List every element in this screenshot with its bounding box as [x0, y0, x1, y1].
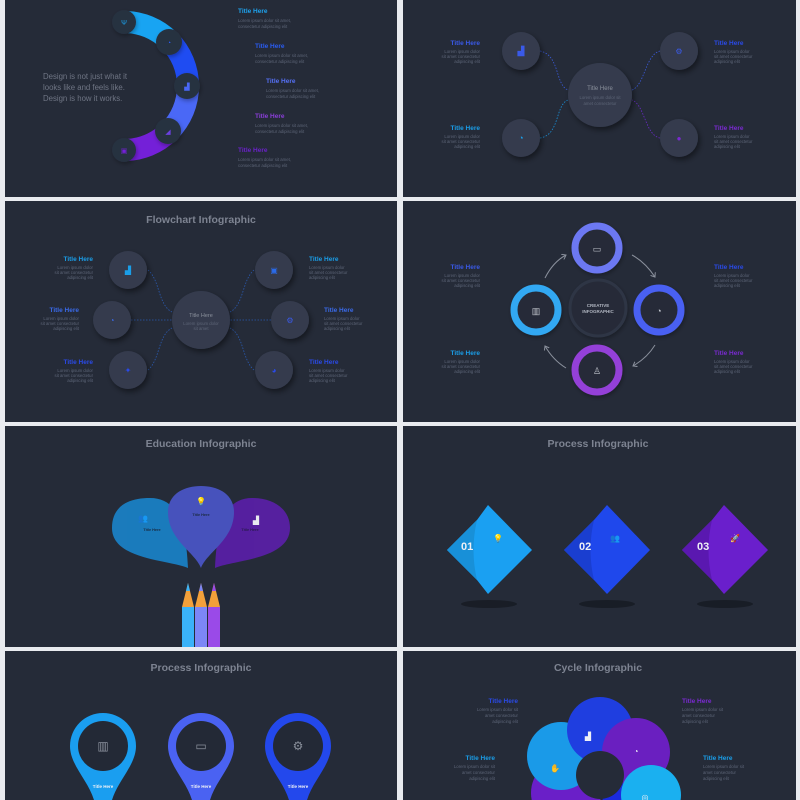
- panel: cycle infographic: adipiscing elit: [469, 776, 496, 781]
- panel: mind map four nodes: ●: [677, 134, 682, 143]
- panel: flowchart infographic: sit amet: [193, 326, 209, 331]
- panel: cycle infographic: adipiscing elit: [703, 776, 730, 781]
- panel: flowchart infographic: ⚙: [286, 316, 294, 325]
- panel: mind map four nodes: adipiscing elit: [454, 59, 481, 64]
- panel: mind map four nodes: sit amet consectetur: [714, 139, 753, 144]
- panel: cycle infographic: Title Here: [682, 698, 712, 705]
- panel: cycle infographic: Title Here: [703, 755, 733, 762]
- panel: mind map four nodes: Lorem ipsum dolor: [444, 134, 481, 139]
- panel: process diamonds: 🚀: [730, 533, 740, 543]
- panel: creative cycle rings: Title Here: [714, 264, 744, 271]
- panel: mind map four nodes: Lorem ipsum dolor: [444, 49, 481, 54]
- panel: creative cycle rings: [403, 201, 796, 422]
- panel: flowchart infographic: adipiscing elit: [67, 275, 94, 280]
- panel: flowchart infographic: ▣: [270, 266, 278, 275]
- panel: mind map four nodes: Title Here: [450, 40, 480, 47]
- petals: [112, 486, 290, 568]
- panel: flowchart infographic: Lorem ipsum dolor: [57, 368, 94, 373]
- panel: flowchart infographic: Title Here: [324, 307, 354, 314]
- panel: mind map four nodes: sit amet consectetur: [442, 54, 481, 59]
- panel: flowchart infographic: adipiscing elit: [309, 378, 336, 383]
- panel: flowchart infographic: Title Here: [309, 256, 339, 263]
- panel: cycle infographic: Cycle Infographic: [554, 662, 642, 674]
- panel: education infographic: 👥: [138, 514, 148, 523]
- panel: flowchart infographic: sit amet consectetur: [55, 270, 94, 275]
- panel: arc infographic: ◔: [167, 40, 171, 47]
- panel: mind map four nodes: [403, 0, 796, 197]
- panel: cycle infographic: ✋: [550, 763, 560, 773]
- panel: process pins: [5, 651, 397, 800]
- quote text: Design is not just what it: [43, 72, 128, 81]
- panel: creative cycle rings: Lorem ipsum dolor: [714, 273, 750, 278]
- panel: process pins: ▥: [97, 739, 109, 753]
- arc titles: Title Here: [266, 78, 296, 85]
- panel: cycle infographic: adipiscing elit: [682, 719, 709, 724]
- arc titles: Lorem ipsum dolor sit amet,: [255, 123, 308, 128]
- panel: flowchart infographic: adipiscing elit: [324, 326, 351, 331]
- panel: creative cycle rings: CREATIVE: [587, 303, 609, 308]
- quote text: looks like and feels like.: [43, 83, 125, 92]
- panel: creative cycle rings: sit amet consectetur: [442, 278, 481, 283]
- panel: arc infographic: ▣: [121, 148, 127, 155]
- panel: process diamonds: 03: [697, 541, 709, 553]
- panel: creative cycle rings: Title Here: [450, 264, 480, 271]
- panel: mind map four nodes: amet consectetur: [584, 101, 617, 106]
- panel: mind map four nodes: Title Here: [450, 125, 480, 132]
- panel: flowchart infographic: adipiscing elit: [67, 378, 94, 383]
- panel: flowchart infographic: Lorem ipsum dolor: [43, 316, 80, 321]
- panel: flowchart infographic: Lorem ipsum dolor: [309, 265, 345, 270]
- panel: cycle infographic: amet consectetur: [485, 713, 519, 718]
- panel: education infographic: [5, 426, 397, 647]
- arc titles: Title Here: [255, 43, 285, 50]
- panel: flowchart infographic: Title Here: [309, 359, 339, 366]
- panel: flowchart infographic: sit amet consectetur: [41, 321, 80, 326]
- arc titles: consectetur adipiscing elit: [255, 129, 305, 134]
- panel: process pins: ▭: [195, 739, 207, 753]
- panel: cycle infographic: Lorem ipsum dolor sit: [454, 764, 496, 769]
- panel: creative cycle rings: Title Here: [714, 350, 744, 357]
- arc segments: [124, 22, 188, 150]
- panel: process diamonds: Process Infographic: [548, 438, 649, 450]
- panel: flowchart infographic: Lorem ipsum dolor: [57, 265, 94, 270]
- arc titles: consectetur adipiscing elit: [255, 59, 305, 64]
- arc node circles: [112, 10, 200, 162]
- panel: mind map four nodes: Title Here: [587, 86, 614, 92]
- panel: creative cycle rings: sit amet consectetur: [714, 364, 753, 369]
- panel: process diamonds: 02: [579, 541, 591, 553]
- panel: flowchart infographic: ▟: [124, 265, 132, 275]
- panel: cycle infographic: Lorem ipsum dolor sit: [477, 707, 519, 712]
- panel: education infographic: Title Here: [241, 528, 259, 532]
- arc titles: Title Here: [238, 147, 268, 154]
- panel: flowchart infographic: Title Here: [63, 359, 93, 366]
- panel: education infographic: Education Infographic: [146, 438, 257, 450]
- panel: education infographic: 💡: [196, 496, 206, 506]
- panel: flowchart infographic: sit amet consectetur: [309, 373, 348, 378]
- panel: mind map four nodes: adipiscing elit: [714, 59, 741, 64]
- panel: cycle infographic: Title Here: [465, 755, 495, 762]
- panel: mind map four nodes: Lorem ipsum dolor: [714, 134, 750, 139]
- panel: creative cycle rings: ▭: [593, 244, 601, 254]
- arc titles: Lorem ipsum dolor sit amet,: [266, 88, 319, 93]
- panel: mind map four nodes: ◔: [518, 133, 524, 143]
- panel: process pins: Title Here: [191, 784, 212, 789]
- arc titles: Lorem ipsum dolor sit amet,: [255, 53, 308, 58]
- panel: process diamonds: 01: [461, 541, 473, 553]
- panel: creative cycle rings: adipiscing elit: [714, 369, 741, 374]
- panel: creative cycle rings: Lorem ipsum dolor: [714, 359, 750, 364]
- panel: process pins: Title Here: [93, 784, 114, 789]
- panel: cycle infographic: Title Here: [488, 698, 518, 705]
- pencils: [182, 583, 220, 647]
- panel: mind map four nodes: adipiscing elit: [714, 144, 741, 149]
- panel: cycle infographic: Lorem ipsum dolor sit: [682, 707, 724, 712]
- panel: education infographic: Title Here: [143, 528, 161, 532]
- panel: education infographic: Title Here: [192, 513, 210, 517]
- panel: mind map four nodes: Lorem ipsum dolor: [714, 49, 750, 54]
- panel: cycle infographic: Lorem ipsum dolor sit: [703, 764, 745, 769]
- arc titles: consectetur adipiscing elit: [238, 24, 288, 29]
- panel: cycle infographic: adipiscing elit: [492, 719, 519, 724]
- panel: mind map four nodes: Title Here: [714, 125, 744, 132]
- panel: mind map four nodes: sit amet consectetur: [714, 54, 753, 59]
- panel: mind map four nodes: Title Here: [714, 40, 744, 47]
- arc titles: consectetur adipiscing elit: [266, 94, 316, 99]
- panel: creative cycle rings: adipiscing elit: [714, 283, 741, 288]
- arc titles: Title Here: [238, 8, 268, 15]
- panel: cycle infographic: amet consectetur: [703, 770, 737, 775]
- panel: process pins: Process Infographic: [151, 662, 252, 674]
- panel: cycle infographic: amet consectetur: [462, 770, 496, 775]
- panel: flowchart infographic: Title Here: [189, 313, 213, 319]
- panel: process pins: ⚙: [293, 739, 303, 753]
- panel: flowchart infographic: ◕: [272, 366, 277, 375]
- panel: creative cycle rings: ▥: [532, 306, 540, 316]
- arc titles: Title Here: [255, 113, 285, 120]
- panel: arc infographic: ▟: [183, 82, 190, 91]
- panel: education infographic: ▟: [252, 515, 260, 525]
- panel: arc infographic: [5, 0, 397, 197]
- arc titles: consectetur adipiscing elit: [238, 163, 288, 168]
- arc titles: [238, 8, 319, 168]
- panel: flowchart infographic: Title Here: [63, 256, 93, 263]
- panel: flowchart infographic: Lorem ipsum dolor: [183, 321, 219, 326]
- panel: cycle infographic: ▟: [584, 731, 592, 741]
- panel: flowchart infographic: [5, 201, 397, 422]
- panel: mind map four nodes: sit amet consectetur: [442, 139, 481, 144]
- panel: flowchart infographic: sit amet consectetur: [55, 373, 94, 378]
- panel: process pins: Title Here: [288, 784, 309, 789]
- panel: process diamonds: 💡: [493, 533, 503, 543]
- arc titles: Lorem ipsum dolor sit amet,: [238, 18, 291, 23]
- panel: creative cycle rings: Lorem ipsum dolor: [444, 359, 481, 364]
- panel: creative cycle rings: sit amet consectetur: [714, 278, 753, 283]
- panel: creative cycle rings: INFOGRAPHIC: [582, 309, 615, 314]
- panel: flowchart infographic: sit amet consectetur: [324, 321, 363, 326]
- panel: mind map four nodes: ⚙: [675, 47, 683, 56]
- panel: mind map four nodes: Lorem ipsum dolor sit: [579, 95, 621, 100]
- panel: creative cycle rings: ◔: [656, 306, 662, 316]
- panel: flowchart infographic: Flowchart Infographic: [146, 214, 256, 226]
- panel: flowchart infographic: adipiscing elit: [309, 275, 336, 280]
- panel: flowchart infographic: Lorem ipsum dolor: [324, 316, 360, 321]
- panel: cycle infographic: [403, 651, 796, 800]
- panel: process diamonds: 👥: [610, 534, 620, 543]
- panel: flowchart infographic: Lorem ipsum dolor: [309, 368, 345, 373]
- panel: arc infographic: ◢: [165, 129, 171, 136]
- panel: mind map four nodes: adipiscing elit: [454, 144, 481, 149]
- panel: creative cycle rings: Lorem ipsum dolor: [444, 273, 481, 278]
- panel: arc infographic: Ψ: [121, 20, 127, 27]
- panel: creative cycle rings: Title Here: [450, 350, 480, 357]
- panel: creative cycle rings: sit amet consectetur: [442, 364, 481, 369]
- panel: flowchart infographic: sit amet consectetur: [309, 270, 348, 275]
- panel: flowchart infographic: adipiscing elit: [53, 326, 80, 331]
- panel: creative cycle rings: adipiscing elit: [454, 283, 481, 288]
- panel: flowchart infographic: ◔: [110, 316, 115, 325]
- panel: creative cycle rings: adipiscing elit: [454, 369, 481, 374]
- panel: creative cycle rings: ♙: [593, 366, 601, 376]
- panel: cycle infographic: ◔: [634, 747, 639, 756]
- arc titles: Lorem ipsum dolor sit amet,: [238, 157, 291, 162]
- panel: flowchart infographic: ✦: [125, 366, 132, 375]
- panel: flowchart infographic: Title Here: [49, 307, 79, 314]
- panel: cycle infographic: amet consectetur: [682, 713, 716, 718]
- quote text: Design is how it works.: [43, 94, 122, 103]
- panel: mind map four nodes: ▟: [517, 45, 526, 57]
- panel: process diamonds: [403, 426, 796, 647]
